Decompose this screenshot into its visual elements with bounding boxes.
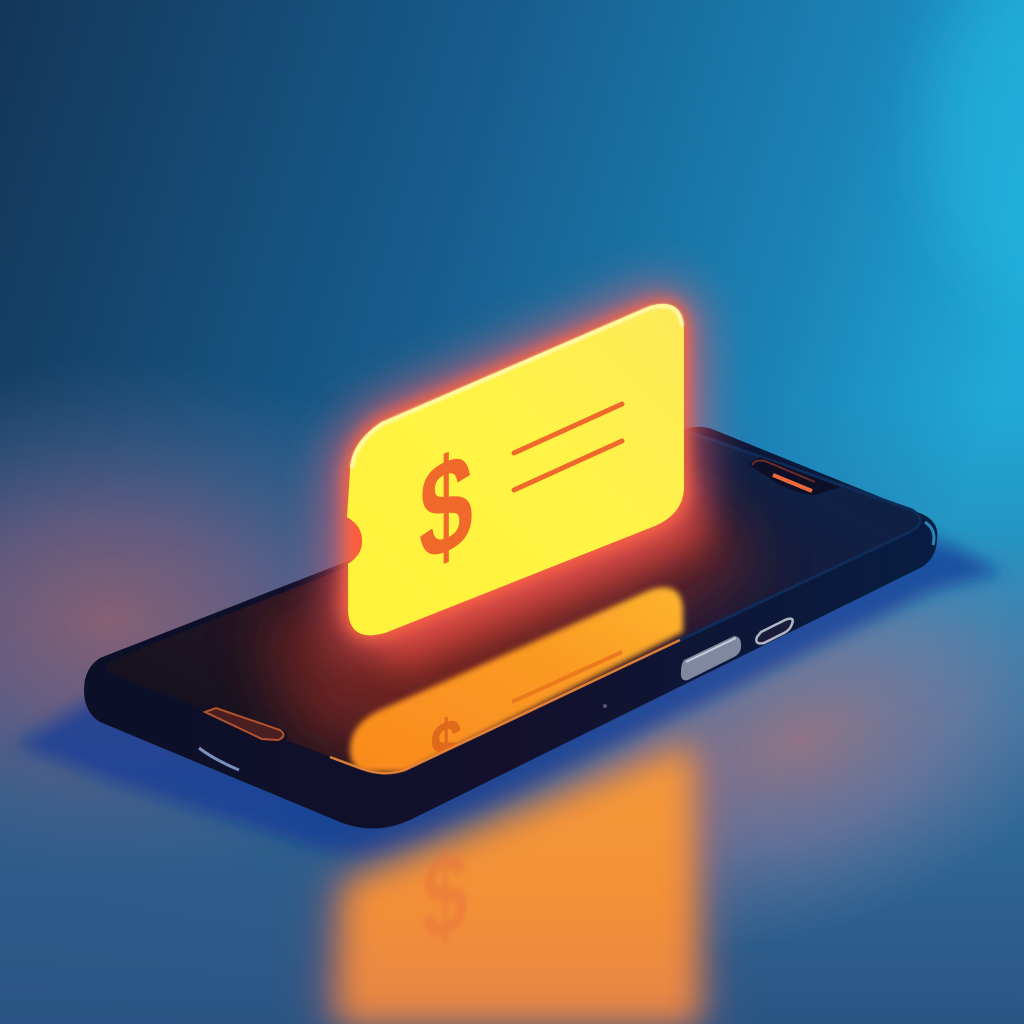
top notch sensor (748, 457, 840, 495)
ticket top highlight (352, 306, 682, 468)
phone cast shadow (16, 540, 1003, 855)
reflection glow on screen (260, 470, 760, 798)
smartphone (84, 427, 937, 829)
bezel highlight (680, 432, 920, 640)
bottom notch speaker (195, 703, 288, 744)
side port (756, 619, 793, 643)
floor reflection of ticket (320, 735, 710, 1024)
ticket text lines (514, 404, 622, 490)
orange screen rim (330, 640, 680, 773)
inner red glow (348, 304, 684, 634)
right edge light (925, 522, 934, 545)
ticket shape (347, 304, 684, 635)
reflection glow on screen: $ (430, 698, 462, 798)
side microphone dot (603, 704, 607, 708)
reflected dollar sign: $ (422, 824, 468, 967)
phone glass screen (106, 432, 920, 773)
dollar sign: $ (419, 420, 473, 593)
glowing ticket (347, 304, 684, 635)
ticket reflection on screen (350, 588, 683, 772)
outer pink glow (348, 304, 684, 634)
front charging port (199, 748, 239, 770)
phone body (84, 427, 937, 829)
silver side button (681, 636, 741, 680)
